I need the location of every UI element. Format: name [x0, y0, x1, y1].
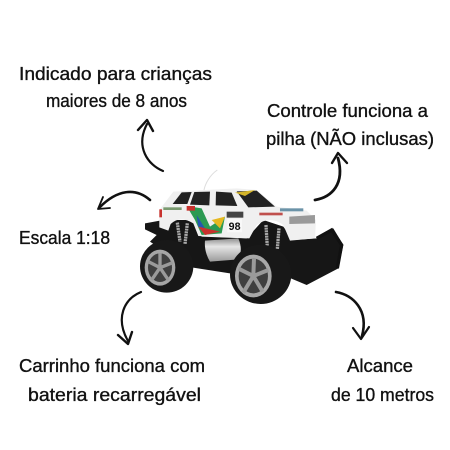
text: remote control batteries: pilha (NÃO inclusas)	[266, 128, 434, 149]
front wheel	[230, 245, 291, 304]
text: range: de 10 metros	[331, 385, 434, 405]
text: scale: Escala 1:18	[19, 228, 110, 248]
truck body	[159, 188, 316, 241]
truck bull bar	[317, 230, 342, 268]
truck antenna	[204, 170, 217, 190]
arrow: to remote control text	[315, 153, 347, 200]
arrow: to scale text	[98, 192, 150, 209]
icon: remote control toy truck	[140, 170, 343, 304]
text: rechargeable battery: bateria recarregável	[28, 385, 201, 405]
truck chassis	[145, 220, 343, 285]
truck suspension springs	[177, 223, 279, 249]
text: range: Alcance	[347, 356, 413, 376]
truck battery cylinder	[205, 238, 241, 262]
rear wheel	[140, 240, 193, 293]
text: age recommendation	[19, 64, 212, 111]
arrow: to age text	[138, 120, 163, 171]
truck livery graphic	[159, 190, 315, 235]
text: remote control batteries: Controle funciona a	[267, 101, 429, 121]
truck windows	[173, 191, 275, 207]
truck livery graphic: 98	[229, 221, 241, 233]
text: range	[331, 356, 434, 405]
text: rechargeable battery	[19, 356, 205, 405]
text: remote control batteries	[266, 101, 434, 149]
arrow: to range text	[336, 292, 369, 339]
text: age recommendation: Indicado para crianças	[19, 64, 212, 84]
text: age recommendation: maiores de 8 anos	[46, 91, 187, 111]
arrow: to rechargeable battery text	[118, 292, 141, 344]
text: rechargeable battery: Carrinho funciona com	[19, 356, 205, 376]
